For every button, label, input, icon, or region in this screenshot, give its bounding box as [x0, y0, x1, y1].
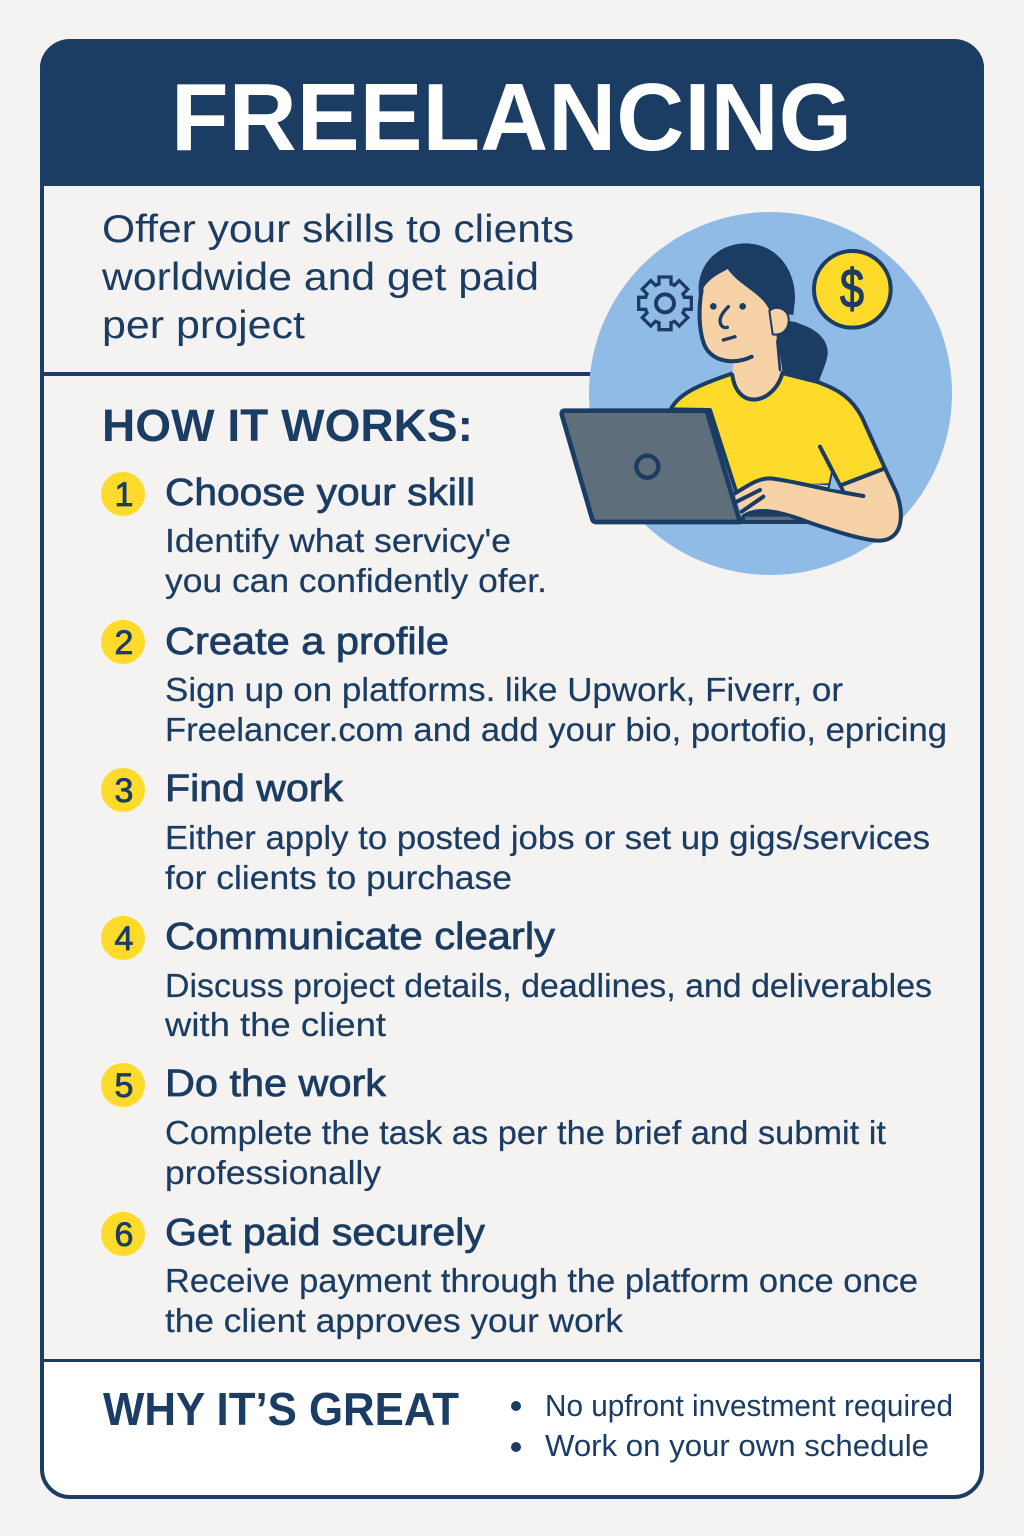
step 1: Identify what servicy'e [165, 522, 511, 559]
step 2: Freelancer.com and add your bio, portofio, epricing [165, 711, 947, 748]
step 4: Discuss project details, deadlines, and deliverables [165, 967, 932, 1004]
illustration: freelancer with laptop [562, 212, 952, 575]
step 2 [101, 620, 947, 748]
footer heading: why it's great: WHY IT’S GREAT [103, 1383, 459, 1435]
intro text: worldwide and get paid [101, 256, 539, 299]
title banner: FREELANCING [171, 64, 852, 171]
step 4: Communicate clearly [165, 916, 555, 958]
step 3 [101, 768, 930, 896]
icon: gear [637, 275, 693, 331]
step 3: for clients to purchase [165, 859, 512, 896]
step 5: professionally [165, 1154, 382, 1191]
step 4: 4 [115, 920, 133, 958]
arm and hand [735, 468, 901, 541]
t-shirt [671, 373, 885, 493]
neck [732, 333, 783, 400]
step 2: 2 [115, 624, 133, 662]
step 5: Do the work [165, 1063, 387, 1105]
step 1: Choose your skill [165, 472, 475, 514]
footer bullet list [511, 1388, 953, 1463]
ear [769, 308, 789, 335]
step 6: the client approves your work [165, 1302, 624, 1339]
step 5: Complete the task as per the brief and submit it [165, 1114, 886, 1151]
step 2: Sign up on platforms. like Upwork, Fiverr, or [165, 671, 843, 708]
step 5: 5 [115, 1067, 133, 1105]
step 6: Receive payment through the platform once once [165, 1262, 918, 1299]
step 5 [101, 1063, 886, 1191]
step 2: Create a profile [165, 621, 449, 663]
step 4 [101, 916, 932, 1043]
intro text [101, 208, 574, 347]
icon: dollar coin: $ [840, 257, 864, 319]
step 6: Get paid securely [165, 1212, 485, 1254]
ponytail [777, 320, 828, 383]
step 3: Find work [165, 768, 344, 810]
footer bullet list: Work on your own schedule [545, 1428, 929, 1463]
step 3: 3 [115, 772, 133, 810]
icon: dollar coin [814, 251, 891, 328]
face [700, 269, 777, 361]
step 4: with the client [164, 1006, 386, 1043]
intro text: per project [102, 304, 305, 347]
step 1 [101, 472, 547, 599]
step 1: you can confidently ofer. [165, 562, 547, 599]
heading: how it works: HOW IT WORKS: [102, 400, 473, 451]
facial features [710, 303, 746, 340]
title banner [40, 40, 984, 186]
footer bullet list: No upfront investment required [545, 1388, 953, 1423]
hair [699, 243, 795, 315]
step 6 [101, 1212, 918, 1339]
step 3: Either apply to posted jobs or set up gigs/services [165, 819, 930, 856]
step 6: 6 [115, 1216, 133, 1254]
laptop [562, 411, 807, 523]
intro text: Offer your skills to clients [102, 208, 574, 251]
step 1: 1 [115, 476, 133, 514]
